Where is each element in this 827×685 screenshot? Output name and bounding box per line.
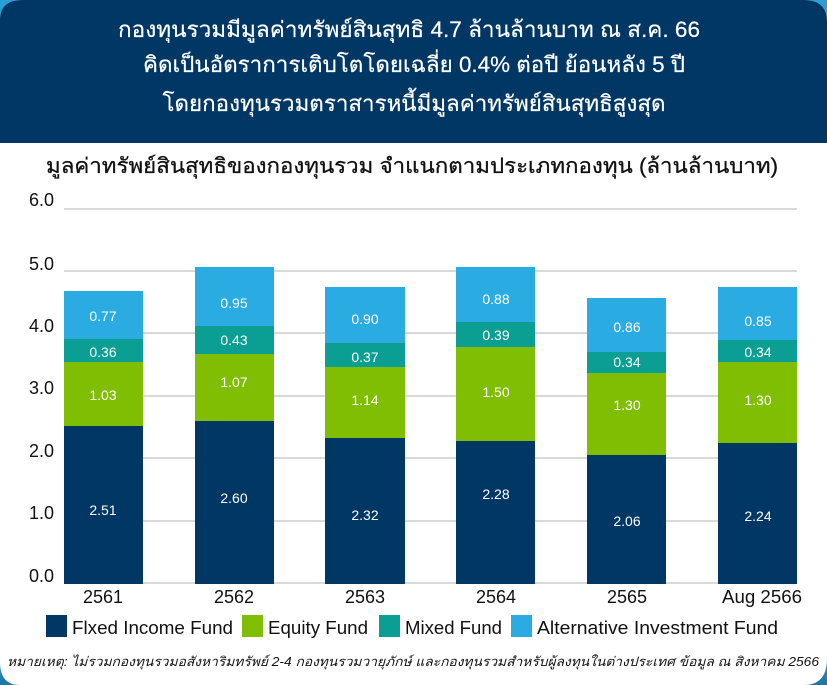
bar 2562 (195, 267, 274, 584)
bar 2564: 1.50 (482, 384, 510, 400)
bar 2564: 2.28 (482, 486, 510, 502)
x axis labels: Aug 2566 (722, 587, 802, 607)
bar Aug 2566: 0.85 (744, 313, 772, 329)
legend: Mixed Fund (405, 618, 502, 638)
header banner: คิดเป็นอัตราการเติบโตโดยเฉลี่ย 0.4% ต่อปี ย้อนหลัง 5 ปี (143, 49, 685, 77)
stacked bar chart (29, 190, 802, 607)
bar 2565: 1.30 (613, 397, 641, 413)
bar Aug 2566: 0.34 (744, 344, 772, 360)
bar 2564 (456, 267, 535, 584)
y axis labels: 0.0 (29, 566, 54, 586)
bar 2563: 2.32 (351, 507, 379, 523)
bar 2563: 1.14 (351, 392, 379, 408)
y axis labels: 3.0 (29, 378, 54, 398)
bar 2565: 0.34 (613, 354, 641, 370)
bar 2561: 0.36 (89, 344, 117, 360)
footnote: หมายเหตุ: ไม่รวมกองทุนรวมอสังหาริมทรัพย์ 2-4 กองทุนรวมวายุภักษ์ และกองทุนรวมสำหรับผู้ลงทุนในต่างประเทศ ข้อมูล ณ สิงหาคม 2566 (7, 654, 820, 670)
legend: Equity Fund (268, 618, 368, 638)
bar 2562: 2.60 (220, 490, 248, 506)
bar 2563 (325, 287, 405, 584)
bar Aug 2566: 1.30 (744, 392, 772, 408)
bar 2563: 0.37 (351, 349, 379, 365)
chart title: มูลค่าทรัพย์สินสุทธิของกองทุนรวม จำแนกตามประเภทกองทุน (ล้านล้านบาท) (46, 154, 778, 179)
header banner: โดยกองทุนรวมตราสารหนี้มีมูลค่าทรัพย์สินสุทธิสูงสุด (162, 88, 666, 117)
bar Aug 2566: 2.24 (744, 508, 772, 524)
header banner (0, 0, 827, 143)
x axis labels (83, 587, 802, 607)
header banner: กองทุนรวมมีมูลค่าทรัพย์สินสุทธิ 4.7 ล้านล้านบาท ณ ส.ค. 66 (118, 17, 700, 43)
bar 2561: 2.51 (89, 502, 117, 518)
y axis labels: 1.0 (29, 503, 54, 523)
bar 2561 (64, 291, 143, 584)
y axis labels (29, 190, 54, 586)
y axis labels: 2.0 (29, 441, 54, 461)
bar 2565: 0.86 (613, 319, 641, 335)
x axis labels: 2565 (607, 587, 647, 607)
bar 2561: 0.77 (89, 308, 117, 324)
bar Aug 2566 (718, 287, 797, 584)
bar 2562: 0.95 (220, 295, 248, 311)
bar 2561: 1.03 (89, 387, 117, 403)
x axis labels: 2564 (476, 587, 516, 607)
legend: Alternative Investment Fund (537, 618, 778, 638)
x axis labels: 2563 (345, 587, 385, 607)
legend (46, 615, 778, 638)
bar 2564: 0.39 (482, 327, 510, 343)
y axis labels: 5.0 (29, 254, 54, 274)
bar 2563: 0.90 (351, 311, 379, 327)
bar 2564: 0.88 (482, 291, 510, 307)
x axis labels: 2562 (214, 587, 254, 607)
bar 2562: 1.07 (220, 374, 248, 390)
legend: Flxed Income Fund (72, 618, 233, 638)
bar 2565: 2.06 (613, 513, 641, 529)
x axis labels: 2561 (83, 587, 123, 607)
bar 2565 (587, 298, 666, 584)
y axis labels: 6.0 (29, 190, 54, 210)
bar 2562: 0.43 (220, 332, 248, 348)
y axis labels: 4.0 (29, 316, 54, 336)
